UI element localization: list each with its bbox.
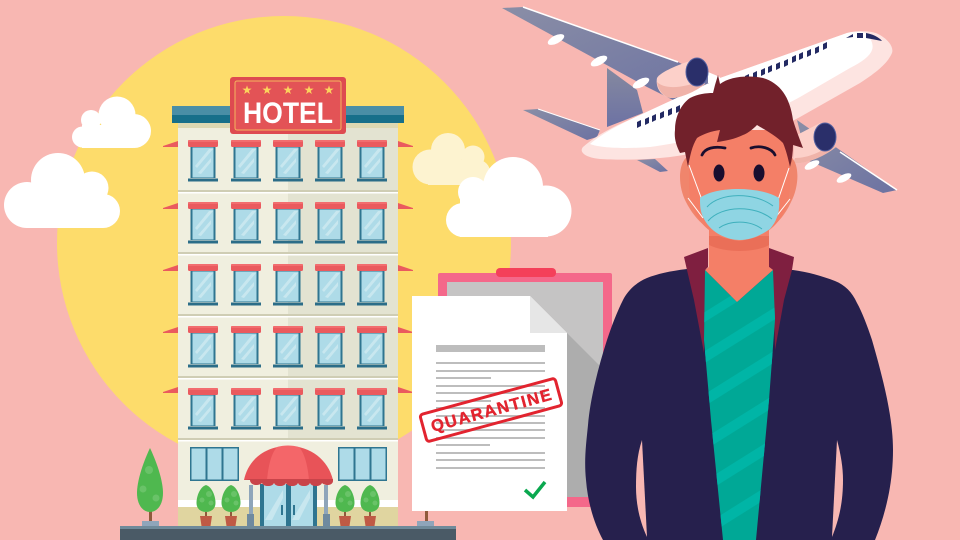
quarantine stamp: QUARANTINE — [429, 386, 553, 436]
document fold — [530, 296, 567, 333]
plane engine: upper — [657, 58, 720, 98]
eyes — [714, 164, 764, 182]
ground floor window left — [190, 447, 239, 481]
hotel sign — [230, 77, 346, 134]
sign stars: ★ — [262, 83, 272, 97]
hotel side awnings — [163, 141, 413, 393]
face mask — [700, 189, 779, 240]
sign stars: ★ — [283, 83, 293, 97]
street tree left — [137, 448, 163, 527]
sign stars: ★ — [324, 83, 334, 97]
plane engine: lower — [793, 123, 836, 163]
clipboard clip — [496, 268, 556, 277]
jacket pocket gaps — [636, 440, 843, 537]
hotel — [120, 77, 456, 540]
document sheet — [412, 296, 567, 511]
cloud: right of sun — [446, 157, 572, 237]
jacket lapels — [684, 248, 794, 353]
sign stars: ★ — [242, 83, 252, 97]
clipboard — [438, 268, 612, 507]
cloud: upper left — [72, 96, 151, 148]
entrance doors and posts — [247, 484, 330, 527]
hotel facade — [178, 122, 398, 526]
jacket — [585, 269, 893, 540]
quarantine document — [412, 296, 567, 511]
cloud: far left — [4, 153, 120, 228]
street tree right base — [417, 505, 434, 527]
hotel roof — [172, 106, 404, 123]
sign text: HOTEL — [243, 97, 333, 130]
entrance dome awning — [244, 446, 333, 486]
plane wing pods — [546, 32, 853, 185]
eyebrows — [702, 147, 775, 155]
ears and cheeks — [680, 155, 797, 241]
potted plants — [196, 485, 380, 526]
hair — [675, 75, 803, 167]
hotel room windows — [188, 140, 387, 430]
shirt — [704, 270, 775, 540]
plane windows — [637, 42, 827, 128]
neck — [705, 228, 773, 302]
mask straps — [688, 165, 790, 218]
airplane — [502, 7, 897, 193]
document text lines — [436, 345, 545, 469]
yellow sun — [57, 16, 511, 470]
face — [689, 130, 790, 240]
person — [585, 75, 893, 540]
ground floor window right — [338, 447, 387, 481]
sign stars — [242, 83, 334, 97]
green check mark — [525, 482, 545, 497]
hotel pavement — [120, 526, 456, 540]
cloud: cream behind building — [412, 133, 490, 185]
plane fuselage — [582, 31, 892, 160]
quarantine stamp — [420, 378, 562, 442]
sign stars: ★ — [304, 83, 314, 97]
plane rear wing and stabilisers — [502, 7, 897, 193]
